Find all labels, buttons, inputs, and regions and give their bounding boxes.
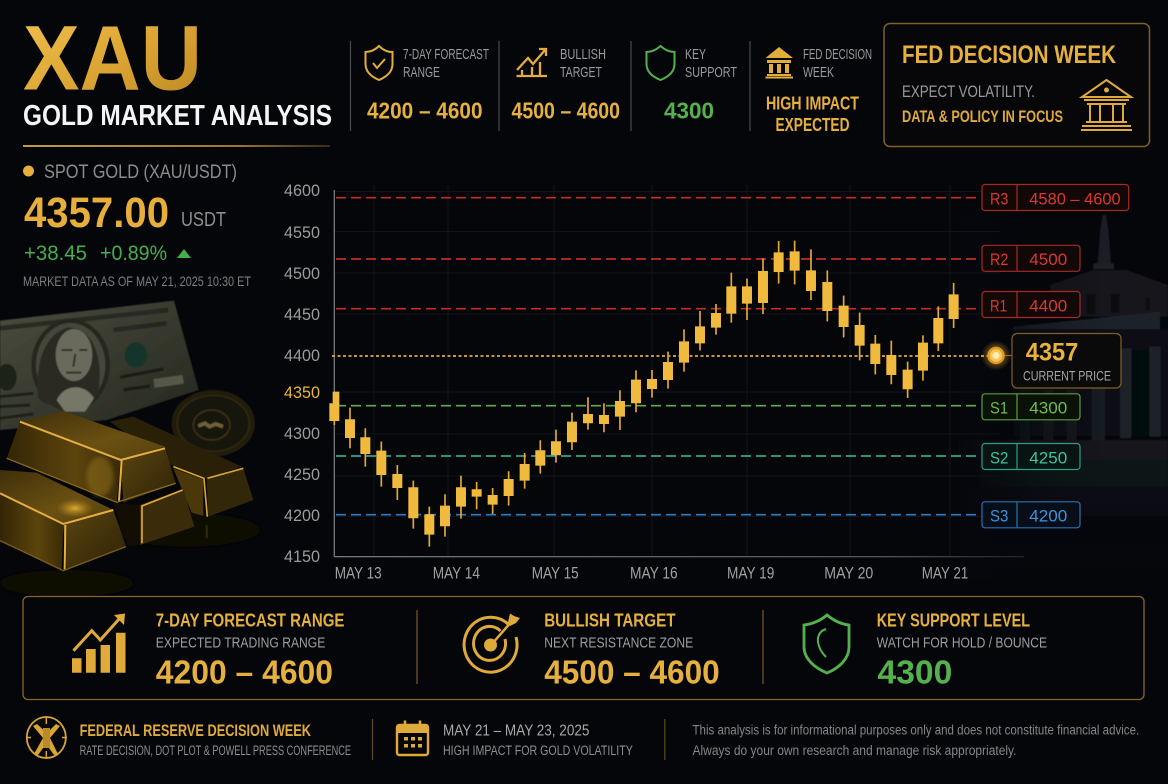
footer: federal reserve: RATE DECISION, DOT PLOT & POWELL PRESS CONFERENCE [80,743,351,758]
x axis labels: MAY 20 [824,565,873,583]
callout: current price: 4357 [1026,339,1078,367]
level tag: S2: 4250 [1029,448,1067,467]
icon: rising chart [516,49,547,76]
callout heading: FED DECISION WEEK [902,41,1116,69]
y axis labels [284,181,320,566]
y axis labels: 4350 [284,383,320,402]
stat: fed decision week: HIGH IMPACT [766,94,859,114]
floor reflections [0,570,133,597]
footer: dates: MAY 21 – MAY 23, 2025 [443,722,589,739]
chart: candlestick price chart [284,181,1024,583]
footer: dates: HIGH IMPACT FOR GOLD VOLATILITY [443,743,633,758]
level tag: R3 [982,184,1129,210]
gold bar: small middle [113,489,194,547]
x axis labels [335,565,968,583]
label: spot gold: SPOT GOLD (XAU/USDT) [44,162,237,183]
candlesticks: May 16 to May 21 [631,241,959,412]
stat: fed decision week [766,46,872,135]
stat: fed decision week: EXPECTED [776,115,850,135]
panel: spot price [23,162,251,289]
level tag: S1 [982,394,1080,420]
summary: 7-day forecast range: 4200 – 4600 [156,654,333,691]
callout text: data and policy: DATA & POLICY IN FOCUS [902,108,1063,126]
stat: 7-day forecast range: RANGE [403,64,440,81]
stat: 7-day forecast range [366,46,489,124]
summary: 7-day forecast range [72,610,344,691]
current price marker [981,340,1012,370]
summary: key support level [804,610,1047,691]
chart axes [333,190,335,556]
level tag: R3: 4580 – 4600 [1029,189,1121,208]
x axis labels: MAY 19 [727,565,774,583]
stat: bullish target: 4500 – 4600 [512,98,620,124]
icon: calendar [397,720,428,755]
stat: bullish target: TARGET [560,64,602,81]
icon: green shield [646,46,674,80]
stat: 7-day forecast range: 4200 – 4600 [367,98,482,124]
background: federal building silhouette [960,215,1168,517]
summary: bullish target [464,610,720,691]
footer: disclaimer: Always do your own research and manage risk appropriately. [692,743,1016,758]
level lines [332,198,990,515]
level tag: S2 [982,444,1080,470]
level tag: R1 [982,292,1080,318]
summary: 7-day forecast range: EXPECTED TRADING RANGE [156,634,325,651]
stat: bullish target [512,46,620,124]
change percent: +0.89% [100,242,167,265]
level tag: R1: 4400 [1029,296,1067,315]
y axis labels: 4300 [284,424,320,443]
icon: up triangle [177,249,191,258]
icon: spot dot [23,166,34,176]
icon: bank large [1081,80,1132,130]
price unit: USDT [181,209,226,231]
level tag: S1: S1 [990,399,1008,418]
title: XAU: XAU [23,8,202,110]
footer: federal reserve [26,716,351,759]
gold bar: top centre [7,411,176,502]
summary: bullish target: 4500 – 4600 [544,654,720,691]
icon: shield [804,615,849,673]
level tag: S2: S2 [990,448,1008,467]
level tag: R1: R1 [990,296,1007,315]
y axis labels: 4150 [284,547,320,566]
dollar bill [0,301,199,430]
callout: fed decision week [884,24,1150,146]
callout: current price [1012,334,1121,388]
summary: key support level: KEY SUPPORT LEVEL [877,610,1030,631]
stat: fed decision week: WEEK [803,64,834,81]
callout: current price: CURRENT PRICE [1023,368,1111,384]
subtitle: GOLD MARKET ANALYSIS [23,100,332,132]
stat: key support: KEY [685,46,706,63]
icon: bar chart with arrow [72,614,126,673]
market timestamp: MARKET DATA AS OF MAY 21, 2025 10:30 ET [23,273,251,289]
icon: federal reserve seal [26,716,67,759]
level tag: R2 [982,245,1080,271]
coin [172,390,255,457]
photo: gold bars, dollar bill and coin [0,301,260,597]
x axis labels: MAY 16 [630,565,678,583]
y axis labels: 4450 [284,305,320,324]
change absolute: +38.45 [24,242,87,265]
x axis labels: MAY 15 [532,565,579,583]
panel: top stat strip [350,41,872,135]
footer: disclaimer [692,723,1139,758]
y axis labels: 4500 [284,264,320,283]
footer: federal reserve: FEDERAL RESERVE DECISION WEEK [80,722,311,740]
icon: bank [766,47,793,78]
icon: shield check [366,46,392,80]
level tag: S3 [982,502,1080,528]
x axis labels: MAY 14 [433,565,480,583]
stat: 7-day forecast range: 7-DAY FORECAST [403,46,489,63]
stat: key support [646,46,737,124]
gold bar: back right [110,417,253,517]
panel: bottom summary [23,596,1144,700]
level tag: S1: 4300 [1029,399,1067,418]
icon: target with arrow [464,614,520,672]
summary: 7-day forecast range: 7-DAY FORECAST RANGE [156,610,344,631]
level tag: S3: S3 [990,507,1008,526]
level tag: R2: R2 [990,250,1008,269]
level tag: R2: 4500 [1029,250,1067,269]
price: 4357.00 [24,189,169,237]
x axis labels: MAY 21 [922,565,968,583]
summary: bullish target: BULLISH TARGET [544,610,676,631]
level tag: S3: 4200 [1029,507,1067,526]
callout text: volatility: EXPECT VOLATILITY. [902,82,1035,101]
stat: key support: SUPPORT [685,64,737,81]
y axis labels: 4400 [284,346,320,365]
footer: dates [397,720,633,758]
x axis labels: MAY 13 [335,565,382,583]
y axis labels: 4550 [284,223,320,242]
stat: key support: 4300 [664,98,714,124]
y axis labels: 4200 [284,506,320,525]
summary: key support level: 4300 [878,654,952,691]
y axis labels: 4600 [284,181,320,200]
gold bar: lower left [0,470,126,571]
y axis labels: 4250 [284,465,320,484]
stat: fed decision week: FED DECISION [803,46,872,63]
summary: key support level: WATCH FOR HOLD / BOUNCE [877,634,1047,651]
candlesticks: May 13 to May 16 [329,390,625,547]
level tag: R3: R3 [990,189,1008,208]
summary: bullish target: NEXT RESISTANCE ZONE [544,634,693,651]
stat: bullish target: BULLISH [560,46,606,63]
chart grid [334,185,1000,556]
